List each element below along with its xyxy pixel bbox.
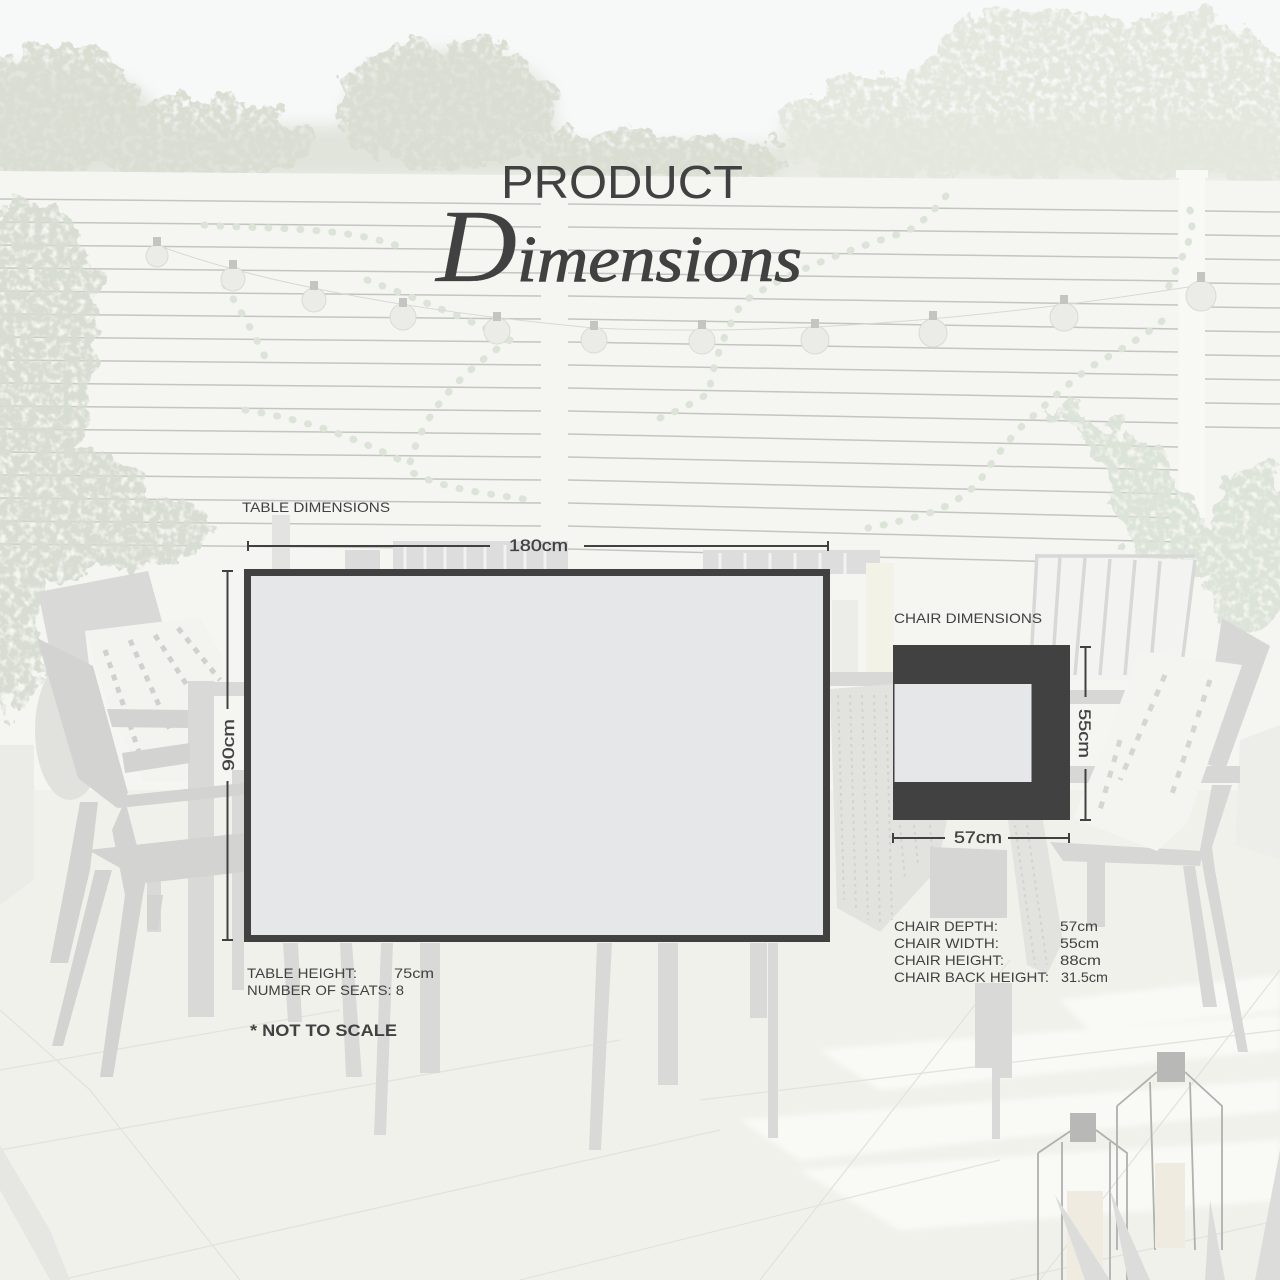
fence post right bbox=[1176, 170, 1208, 570]
fence bbox=[0, 171, 1280, 800]
table specifications: TABLE HEIGHT: bbox=[247, 965, 357, 981]
floor tile lines bbox=[0, 960, 1280, 1280]
left planter bbox=[0, 745, 34, 905]
chair specifications: CHAIR DEPTH: bbox=[894, 918, 998, 934]
ivy bbox=[204, 196, 1192, 528]
table specifications: NUMBER OF SEATS: 8 bbox=[247, 982, 404, 998]
string lights bbox=[146, 237, 1216, 354]
table specifications: 75cm bbox=[394, 965, 434, 981]
title bbox=[434, 156, 802, 304]
left cushion bbox=[85, 617, 223, 781]
far chairs behind table bbox=[272, 515, 880, 574]
lantern tops bbox=[1070, 1052, 1185, 1142]
chair specifications: 55cm bbox=[1060, 935, 1099, 951]
sky bbox=[0, 0, 1280, 200]
heading: chair dimensions: CHAIR DIMENSIONS bbox=[894, 610, 1042, 626]
chair specifications: 57cm bbox=[1060, 918, 1098, 934]
left front chair bbox=[37, 638, 244, 1077]
lanterns bbox=[1038, 1072, 1222, 1280]
note: not to scale: * NOT TO SCALE bbox=[250, 1021, 397, 1040]
foliage base band bbox=[0, 50, 1280, 185]
chair specifications bbox=[894, 918, 1108, 985]
chair specifications: CHAIR WIDTH: bbox=[894, 935, 999, 951]
table items bbox=[830, 563, 896, 686]
lantern candles bbox=[1067, 1163, 1185, 1280]
chair seat diagram bbox=[893, 645, 1070, 820]
depth arrow: 90cm: 90cm bbox=[219, 719, 238, 771]
fence slats bbox=[0, 199, 1280, 565]
chair specifications: 88cm bbox=[1060, 952, 1101, 968]
heading: Dimensions script: Dimensions bbox=[434, 189, 802, 304]
dark pot bbox=[35, 660, 105, 800]
width arrow: 57cm: 57cm bbox=[954, 828, 1002, 847]
floor bbox=[0, 790, 1280, 1280]
table top diagram bbox=[248, 572, 826, 938]
foliage behind fence bbox=[0, 10, 1280, 190]
chair specifications: CHAIR HEIGHT: bbox=[894, 952, 1004, 968]
width arrow: 57cm bbox=[893, 828, 1069, 847]
chair specifications: 31.5cm bbox=[1061, 969, 1108, 985]
depth arrow: 55cm bbox=[1075, 647, 1094, 820]
right back chair bbox=[1030, 554, 1195, 680]
width arrow: 180cm bbox=[248, 536, 828, 555]
table frame and legs bbox=[188, 681, 1012, 1150]
right cushion bbox=[1073, 651, 1242, 851]
panel: chair dimensions bbox=[893, 610, 1108, 985]
right planter bbox=[1235, 725, 1280, 860]
panel: table dimensions bbox=[219, 499, 828, 1040]
left back chair bbox=[38, 571, 163, 932]
depth arrow: 90cm bbox=[219, 571, 238, 940]
heading: PRODUCT: PRODUCT bbox=[501, 156, 743, 208]
table specifications bbox=[247, 965, 434, 998]
chair specifications: CHAIR BACK HEIGHT: bbox=[894, 969, 1049, 985]
floor sun stripes bbox=[740, 975, 1280, 1230]
heading: table dimensions: TABLE DIMENSIONS bbox=[242, 499, 390, 515]
left plant bbox=[0, 200, 215, 710]
foreground leaves bbox=[0, 1145, 1280, 1280]
blanket bbox=[830, 684, 1063, 974]
depth arrow: 55cm: 55cm bbox=[1075, 709, 1094, 758]
width arrow: 180cm: 180cm bbox=[509, 536, 568, 555]
right chair bbox=[1050, 618, 1270, 1052]
right palm bbox=[1045, 400, 1280, 635]
